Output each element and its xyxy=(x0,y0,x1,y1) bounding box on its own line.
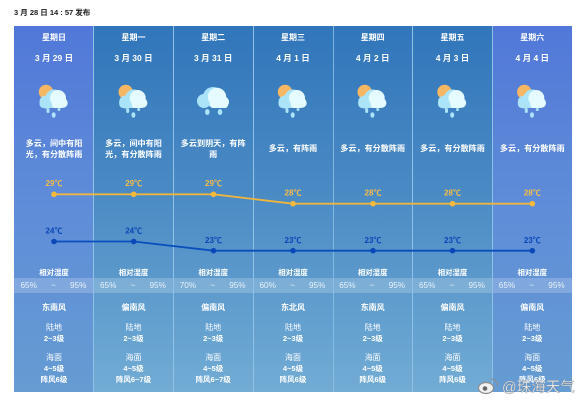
panel: Thursday 4/2: 65% xyxy=(339,281,356,290)
panel: Tuesday 3/31: 95% xyxy=(229,281,246,290)
chart: high temperature line: 29℃ xyxy=(205,179,222,188)
chart: low temperature line: 23℃ xyxy=(205,236,222,245)
panel: Friday 4/3: 偏南风 xyxy=(440,303,464,312)
panel: Tuesday 3/31 xyxy=(173,26,253,392)
panel: Saturday 4/4: 4 月 4 日 xyxy=(516,53,549,63)
panel: Tuesday 3/31: 相对湿度 xyxy=(198,268,228,277)
panel: Tuesday 3/31: 海面 xyxy=(205,353,221,362)
icon: sun cloud rain, Monday xyxy=(118,85,147,118)
chart: high temperature line xyxy=(46,179,541,206)
panel: Wednesday 4/1: 海面 xyxy=(285,353,301,362)
panel: Monday 3/30: 95% xyxy=(150,281,166,290)
panel: Wednesday 4/1: 陆地 xyxy=(285,323,301,332)
panel: Wednesday 4/1: 多云，有阵雨 xyxy=(269,144,317,153)
panel: Thursday 4/2: 多云，有分散阵雨 xyxy=(340,144,405,153)
chart: high temperature line: 28℃ xyxy=(365,188,381,198)
panel: Sunday 3/29: 2~3级 xyxy=(44,334,64,343)
icon: sun cloud rain, Wednesday xyxy=(278,85,307,118)
panel: Friday 4/3: 4~5级 xyxy=(442,364,463,373)
panel: Thursday 4/2: ~ xyxy=(370,281,374,290)
panel: Tuesday 3/31: 4~5级 xyxy=(203,364,223,373)
chart: high temperature line: 29℃ xyxy=(46,179,62,188)
panel: Saturday 4/4 xyxy=(492,26,572,392)
panel: Sunday 3/29 xyxy=(14,26,94,392)
panel: Friday 4/3: 2~3级 xyxy=(442,334,463,343)
panel: Sunday 3/29: 阵风6级 xyxy=(41,375,67,384)
chart: low temperature line: 23℃ xyxy=(444,236,461,245)
panel: Monday 3/30 xyxy=(94,26,174,392)
panel: Thursday 4/2: 相对湿度 xyxy=(358,268,387,277)
panel: Friday 4/3: 陆地 xyxy=(444,323,460,332)
panel: Monday 3/30: 多云，间中有阳光，有分散阵雨 xyxy=(105,139,162,158)
panel: Monday 3/30: 65% xyxy=(100,281,116,290)
icon: cloud rain, Tuesday xyxy=(197,87,229,115)
icon: sun cloud rain, Saturday xyxy=(517,85,546,118)
panel: Sunday 3/29: 65% xyxy=(20,281,37,290)
chart: low temperature line: 23℃ xyxy=(365,236,381,245)
panel: Saturday 4/4: 陆地 xyxy=(524,323,540,332)
panel: Thursday 4/2: 阵风6级 xyxy=(359,375,386,384)
panel: Wednesday 4/1 xyxy=(253,26,333,392)
panel: Sunday 3/29: 星期日 xyxy=(42,33,66,42)
publish time: 3 月 28 日 14 : 57 发布 xyxy=(14,8,90,17)
chart: low temperature line: 23℃ xyxy=(285,236,301,245)
panel: Sunday 3/29: 东南风 xyxy=(42,303,66,312)
panel: Monday 3/30: 3 月 30 日 xyxy=(114,53,153,63)
panel: Saturday 4/4: 65% xyxy=(499,281,515,290)
panel: Saturday 4/4: 4~5级 xyxy=(522,364,542,373)
panel: Thursday 4/2: 星期四 xyxy=(361,33,385,42)
chart: high temperature line: 28℃ xyxy=(285,188,301,198)
panel: Thursday 4/2: 2~3级 xyxy=(363,334,383,343)
panel: Saturday 4/4: 95% xyxy=(548,281,565,290)
panel: Saturday 4/4: 偏南风 xyxy=(520,303,544,312)
panel: Sunday 3/29: 相对湿度 xyxy=(39,268,69,277)
panel: Saturday 4/4: ~ xyxy=(529,281,534,290)
icon: sun cloud rain, Sunday xyxy=(39,85,68,118)
panel: Thursday 4/2: 陆地 xyxy=(365,323,381,332)
panel: Wednesday 4/1: 相对湿度 xyxy=(278,268,308,277)
panel: Sunday 3/29: 4~5级 xyxy=(44,364,64,373)
panel: Wednesday 4/1: ~ xyxy=(290,281,295,290)
panel: Thursday 4/2: 4~5级 xyxy=(363,364,383,373)
panel: Monday 3/30: 星期一 xyxy=(122,33,146,42)
panel: Friday 4/3 xyxy=(412,26,492,392)
panel: Wednesday 4/1: 星期三 xyxy=(281,33,305,42)
panel: Wednesday 4/1: 2~3级 xyxy=(283,334,303,343)
chart: low temperature line xyxy=(46,226,541,254)
panel: Sunday 3/29: 海面 xyxy=(46,353,62,362)
chart: low temperature line: 24℃ xyxy=(125,226,142,236)
chart: low temperature line: 24℃ xyxy=(46,226,62,236)
panel: Sunday 3/29: ~ xyxy=(51,281,56,290)
panel: Friday 4/3: 星期五 xyxy=(440,33,464,42)
panel: Tuesday 3/31: 阵风6~7级 xyxy=(196,375,231,384)
panel: Friday 4/3: ~ xyxy=(450,281,454,290)
panel: Tuesday 3/31: 偏南风 xyxy=(201,303,225,312)
panel: Wednesday 4/1: 95% xyxy=(309,281,325,290)
icon: sun cloud rain, Friday xyxy=(437,85,466,118)
panel: Tuesday 3/31: ~ xyxy=(210,281,215,290)
panel: Friday 4/3: 多云，有分散阵雨 xyxy=(420,144,485,153)
icon: sun cloud rain, Thursday xyxy=(358,85,386,118)
panel: Saturday 4/4: 星期六 xyxy=(520,33,544,42)
panel: Sunday 3/29: 95% xyxy=(70,281,86,290)
panel: Wednesday 4/1: 东北风 xyxy=(281,303,305,312)
panel: Saturday 4/4: 阵风6级 xyxy=(519,375,546,384)
chart: high temperature line: 29℃ xyxy=(125,179,142,188)
panel: Thursday 4/2: 4 月 2 日 xyxy=(356,53,389,63)
panel: Tuesday 3/31: 2~3级 xyxy=(203,334,223,343)
panel: Thursday 4/2 xyxy=(333,26,413,392)
panel: Wednesday 4/1: 60% xyxy=(260,281,276,290)
watermark: Weibo handle: @珠海天气 xyxy=(502,379,575,396)
panel: Friday 4/3: 阵风6级 xyxy=(439,375,466,384)
panel: Monday 3/30: 偏南风 xyxy=(122,303,146,312)
panel: Monday 3/30: 相对湿度 xyxy=(119,268,148,277)
panel: Friday 4/3: 相对湿度 xyxy=(438,268,467,277)
panel: Sunday 3/29: 陆地 xyxy=(46,323,62,332)
panel: Friday 4/3: 海面 xyxy=(444,353,460,362)
panel: Tuesday 3/31: 70% xyxy=(180,281,196,290)
panel: Sunday 3/29: 多云，间中有阳光，有分散阵雨 xyxy=(26,139,82,158)
panel: Thursday 4/2: 95% xyxy=(389,281,405,290)
panel: Monday 3/30: 2~3级 xyxy=(123,334,144,343)
panel: Saturday 4/4: 多云，有分散阵雨 xyxy=(500,144,565,153)
chart: high temperature line: 28℃ xyxy=(524,188,541,198)
panel: Monday 3/30: 陆地 xyxy=(126,323,142,332)
panel: Thursday 4/2: 东南风 xyxy=(361,303,385,312)
panel: Monday 3/30: 阵风6~7级 xyxy=(116,375,151,384)
panel: Friday 4/3: 4 月 3 日 xyxy=(436,53,469,63)
panel: Sunday 3/29: 3 月 29 日 xyxy=(35,53,73,63)
panel: Monday 3/30: 4~5级 xyxy=(123,364,144,373)
panel: Saturday 4/4: 相对湿度 xyxy=(518,268,547,277)
panel: Wednesday 4/1: 阵风6级 xyxy=(280,375,306,384)
panel: Tuesday 3/31: 3 月 31 日 xyxy=(194,53,232,63)
panel: Friday 4/3: 95% xyxy=(468,281,485,290)
panel: Monday 3/30: 海面 xyxy=(126,353,142,362)
panel: Tuesday 3/31: 星期二 xyxy=(201,33,225,42)
panel: Wednesday 4/1: 4 月 1 日 xyxy=(276,53,310,63)
panel: Thursday 4/2: 海面 xyxy=(365,353,381,362)
chart: low temperature line: 23℃ xyxy=(524,236,541,245)
panel: Friday 4/3: 65% xyxy=(419,281,435,290)
chart: high temperature line: 28℃ xyxy=(444,188,461,198)
panel: Tuesday 3/31: 陆地 xyxy=(205,323,221,332)
panel: Monday 3/30: ~ xyxy=(130,281,135,290)
panel: Tuesday 3/31: 多云到阴天，有阵雨 xyxy=(181,139,246,158)
panel: Wednesday 4/1: 4~5级 xyxy=(283,364,303,373)
panel: Saturday 4/4: 海面 xyxy=(524,353,540,362)
panel: Saturday 4/4: 2~3级 xyxy=(522,334,542,343)
